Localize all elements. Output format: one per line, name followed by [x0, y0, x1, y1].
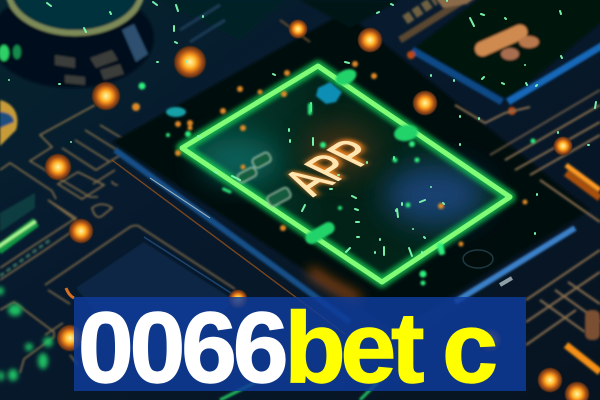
phone body [112, 12, 590, 334]
APP text: APP [270, 133, 391, 203]
APP glow: APP [270, 131, 393, 203]
small orange sparks [132, 61, 528, 246]
gold circuit traces left [0, 105, 235, 373]
teal light [166, 107, 186, 117]
gold traces right [455, 90, 600, 345]
green sparks [9, 0, 596, 256]
orange bars right [566, 165, 600, 372]
green glow sparks [138, 82, 536, 286]
neon frame [182, 66, 510, 282]
app icons on screen [236, 151, 292, 208]
title banner [74, 297, 526, 391]
neon bar left [0, 193, 50, 276]
top right chip [400, 0, 600, 115]
neon frame nodes [303, 66, 419, 246]
bottom centre glow [220, 370, 390, 400]
top centre chip [160, 0, 400, 42]
chip bottom left [66, 237, 234, 360]
blue square on screen [316, 82, 342, 104]
green lights bottom left [0, 287, 53, 381]
poker chip top left [0, 0, 154, 146]
phone screen [166, 65, 512, 283]
